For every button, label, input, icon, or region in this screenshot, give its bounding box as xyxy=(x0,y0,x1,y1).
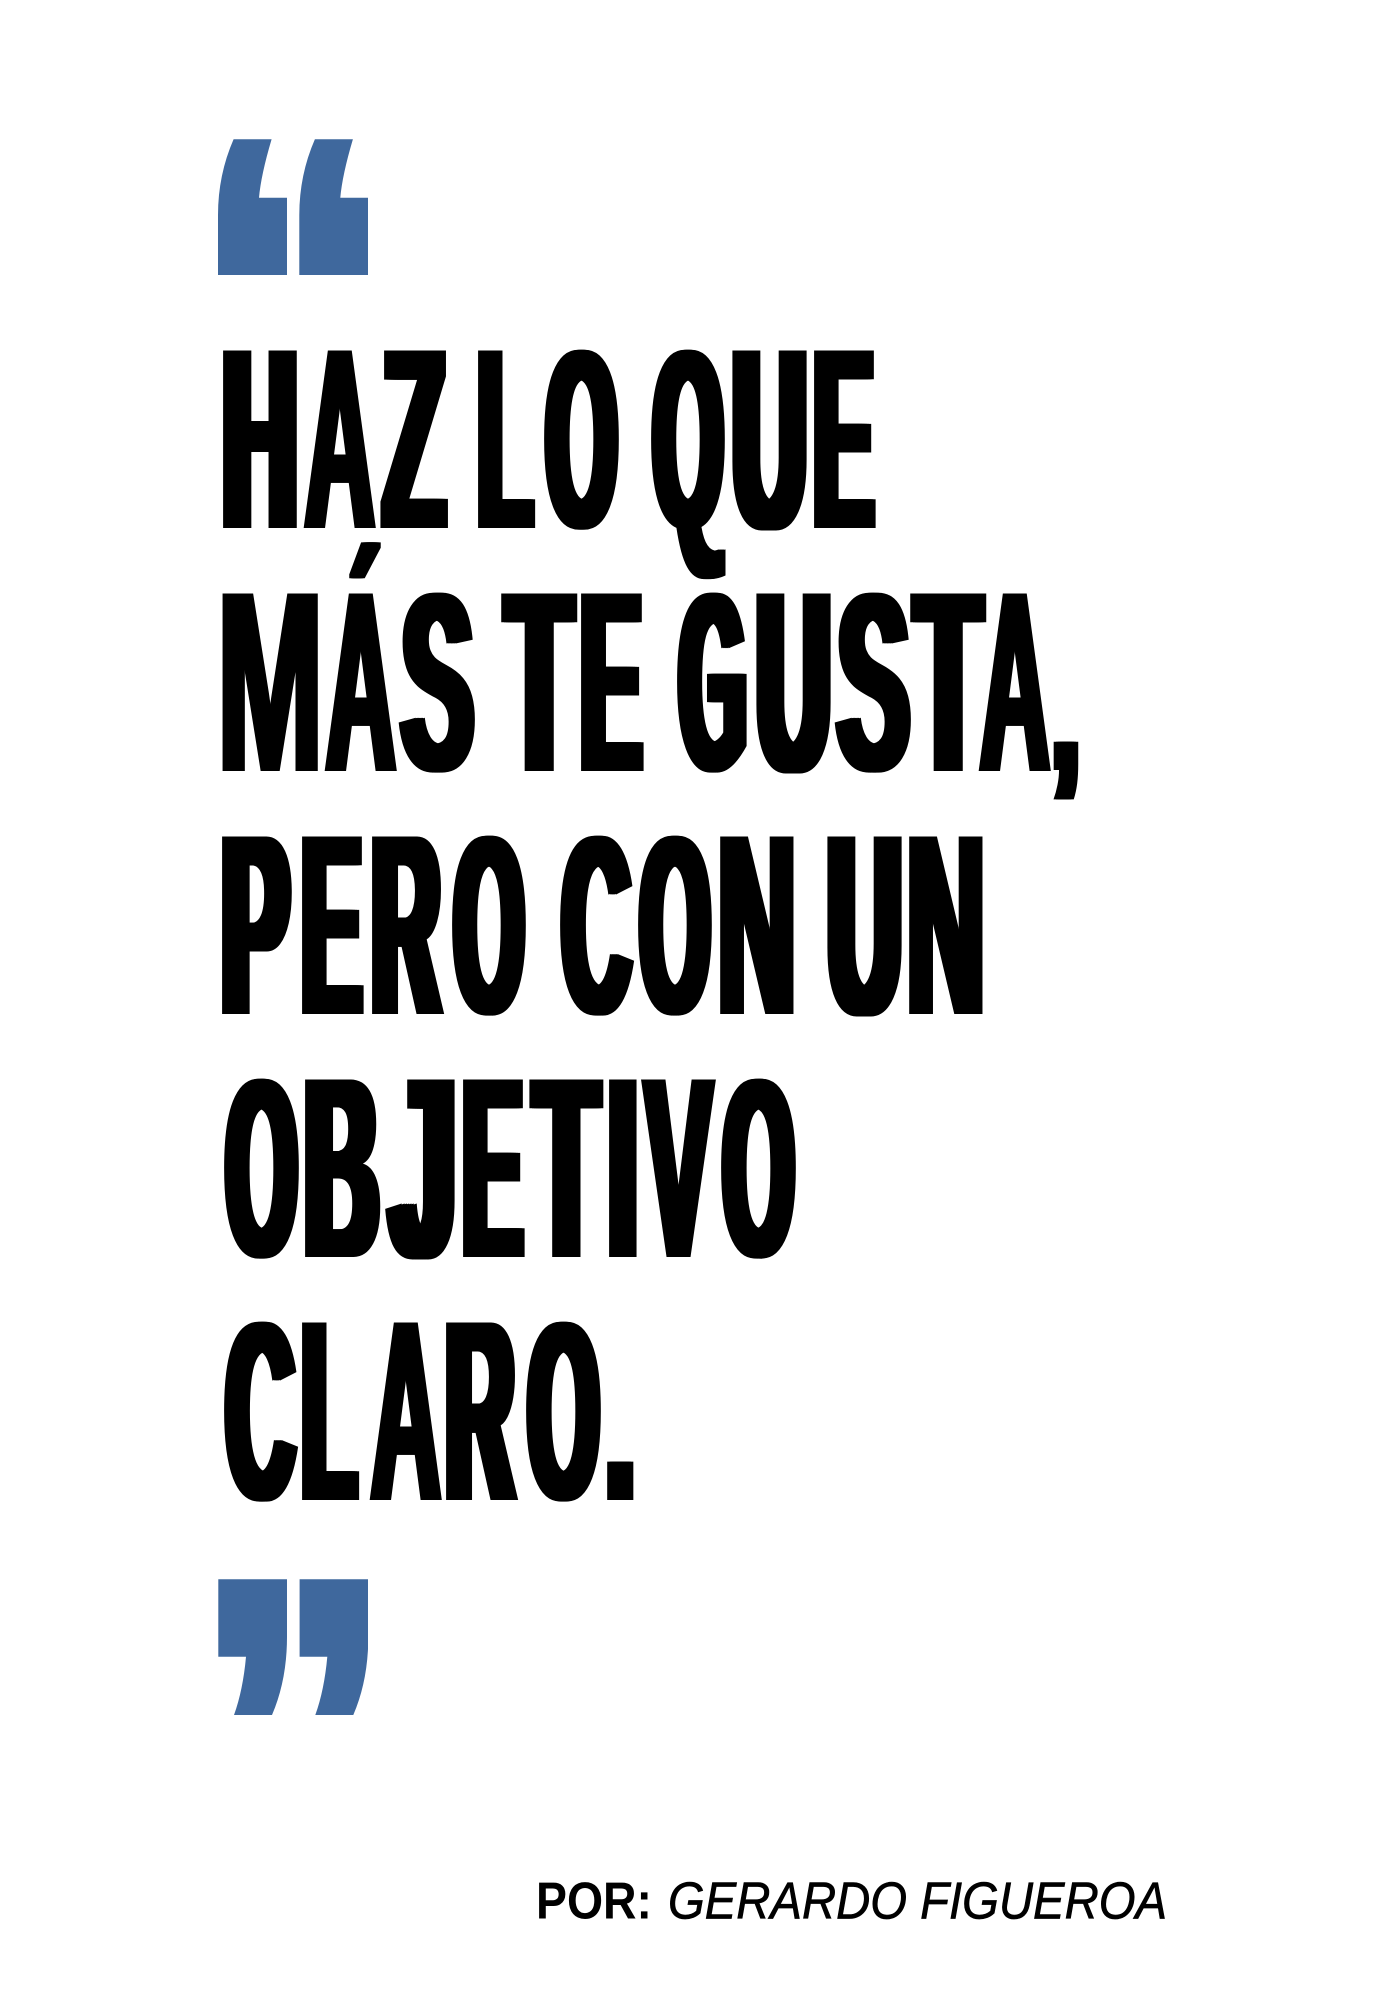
heading line 3: PERO CON UN: N xyxy=(718,780,796,1068)
heading line 5: CLARO.: C xyxy=(223,1278,297,1579)
heading line 3: PERO CON UN: U xyxy=(828,780,901,1068)
heading line 4: OBJETIVO: E xyxy=(463,1022,523,1312)
heading line 4: OBJETIVO: O xyxy=(223,1035,300,1336)
heading line 5: CLARO. xyxy=(223,1266,634,1579)
heading line 5: CLARO.: O xyxy=(525,1278,602,1579)
heading line 4: OBJETIVO: V xyxy=(645,1022,712,1312)
heading line 4: OBJETIVO: I xyxy=(609,1022,636,1312)
heading line 4: OBJETIVO: J xyxy=(391,1022,455,1312)
heading line 2: MÁS TE GUSTA,: T xyxy=(916,536,981,826)
heading line 3: PERO CON UN: N xyxy=(907,780,985,1068)
heading line 3: PERO CON UN: O xyxy=(451,792,527,1093)
heading line 1: HAZ LO QUE: A xyxy=(305,294,374,582)
heading line 5: CLARO.: L xyxy=(302,1266,356,1554)
heading line 5: CLARO.: . xyxy=(607,1266,633,1554)
heading line 2: MÁS TE GUSTA,: A xyxy=(980,536,1049,826)
icon: closing quotation mark xyxy=(218,1579,368,1715)
icon: opening quotation mark xyxy=(218,139,368,275)
heading line 1: HAZ LO QUE: L xyxy=(478,294,532,582)
heading line 1: HAZ LO QUE: U xyxy=(733,294,806,582)
heading line 2: MÁS TE GUSTA, xyxy=(217,536,1078,1708)
heading line 4: OBJETIVO xyxy=(223,1022,797,1708)
heading line 2: MÁS TE GUSTA,: E xyxy=(581,536,641,826)
byline: author credit: POR: xyxy=(536,1873,652,1930)
heading line 4: OBJETIVO: O xyxy=(720,1035,797,1336)
heading line 3: PERO CON UN xyxy=(222,780,985,1502)
heading line 4: OBJETIVO: B xyxy=(305,1022,378,1312)
heading line 5: CLARO.: R xyxy=(446,1266,514,1554)
heading line 1: HAZ LO QUE: H xyxy=(223,294,297,582)
heading line 2: MÁS TE GUSTA,: , xyxy=(1054,599,1078,811)
heading line 2: MÁS TE GUSTA,: S xyxy=(837,549,911,850)
heading line 3: PERO CON UN: E xyxy=(302,780,362,1068)
heading line 1: HAZ LO QUE xyxy=(223,294,1077,1502)
heading line 2: MÁS TE GUSTA,: Á xyxy=(326,536,395,826)
heading line 2: MÁS TE GUSTA,: G xyxy=(676,549,749,850)
heading line 5: CLARO.: A xyxy=(371,1266,440,1554)
heading line 2: MÁS TE GUSTA,: T xyxy=(507,536,572,826)
heading line 1: HAZ LO QUE: E xyxy=(814,294,874,582)
heading line 3: PERO CON UN: P xyxy=(222,780,289,1068)
heading line 3: PERO CON UN: R xyxy=(372,780,440,1068)
heading line 2: MÁS TE GUSTA,: M xyxy=(217,536,323,826)
heading line 1: HAZ LO QUE: Q xyxy=(650,306,726,607)
heading line 2: MÁS TE GUSTA,: S xyxy=(401,549,475,850)
heading line 2: MÁS TE GUSTA,: U xyxy=(757,536,830,826)
heading line 1: HAZ LO QUE: Z xyxy=(384,294,444,582)
heading line 1: HAZ LO QUE: O xyxy=(543,306,620,607)
heading line 3: PERO CON UN: O xyxy=(637,792,713,1093)
heading line 4: OBJETIVO: T xyxy=(535,1022,598,1312)
heading line 3: PERO CON UN: C xyxy=(559,792,633,1093)
